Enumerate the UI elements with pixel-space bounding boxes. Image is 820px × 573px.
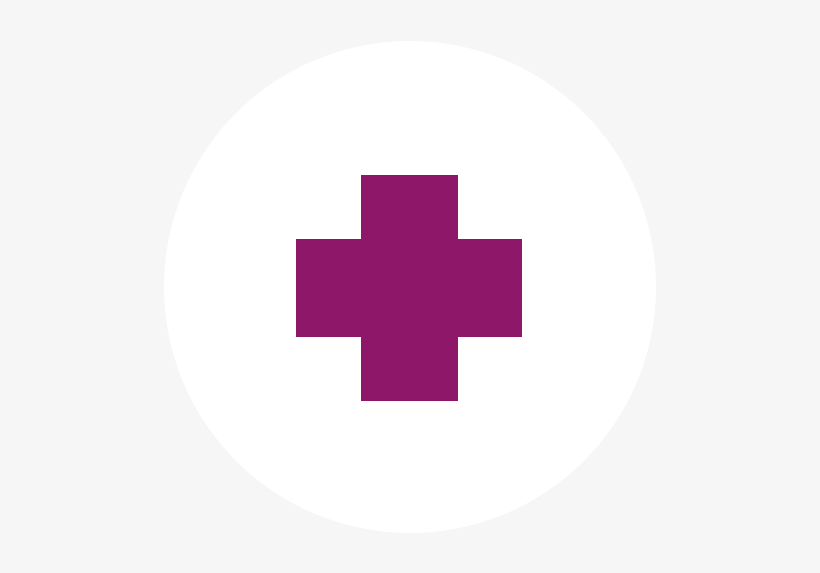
icon: white circle background bbox=[164, 41, 656, 533]
icon: purple medical cross bbox=[296, 175, 522, 401]
